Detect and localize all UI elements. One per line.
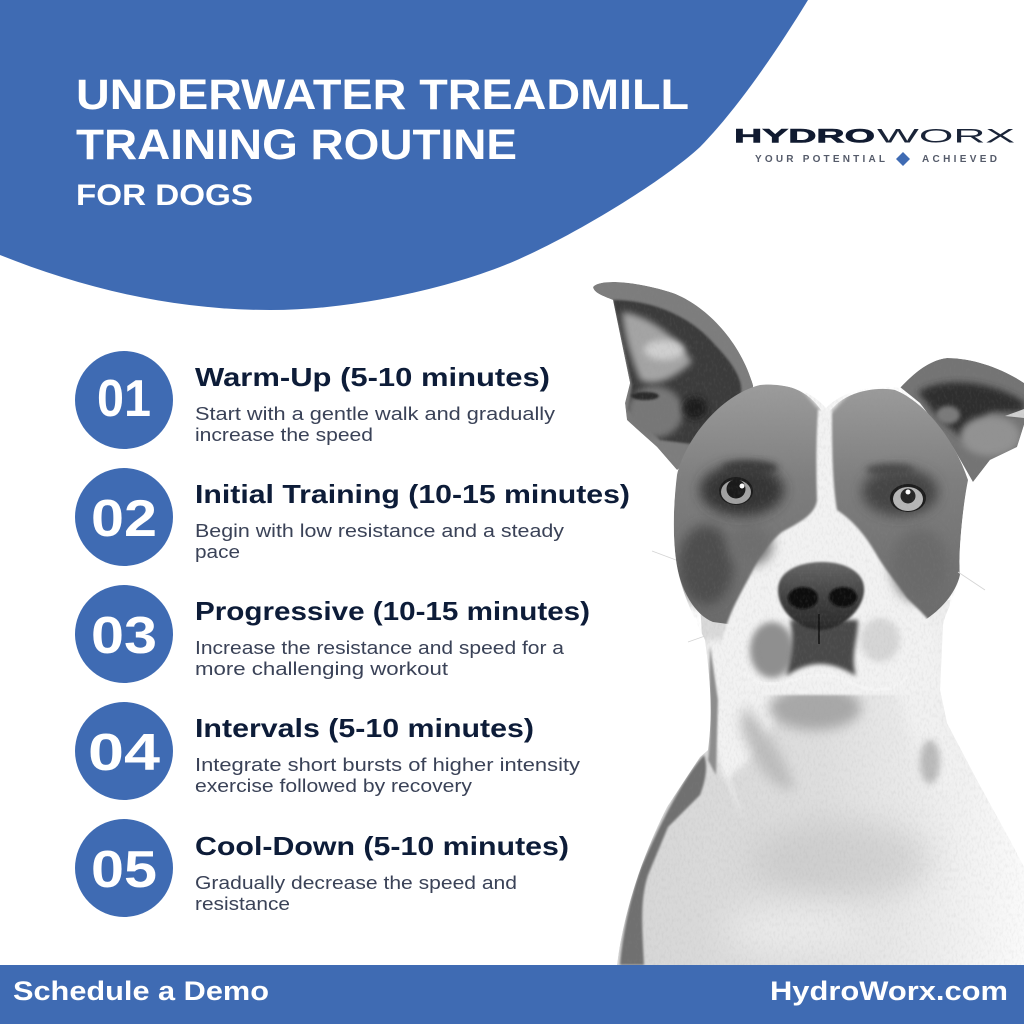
step 01: Warm-Up (5-10 minutes) [195,362,550,392]
step 03: Progressive (10-15 minutes) [195,596,590,626]
eye patches [700,464,784,516]
step 03 [75,585,590,683]
step list [75,351,630,917]
step 04 [75,702,581,800]
dog right ear [900,358,1024,482]
lip line [770,682,774,683]
step 02: 02 [91,490,157,548]
step 01 [75,351,556,449]
step 03: 03 [91,607,157,665]
right eye [890,484,926,512]
step 01: 01 [97,370,151,428]
title [76,71,689,212]
white blaze and muzzle [722,410,940,695]
logo: HydroWorx [734,126,1015,166]
muzzle shading [750,622,794,678]
step 05: Gradually decrease the speed and [195,872,517,893]
step 01: Start with a gentle walk and gradually [195,403,556,424]
nose [778,562,864,630]
step 02: Initial Training (10-15 minutes) [195,479,630,509]
step 04: 04 [88,724,160,782]
step 05: resistance [195,893,290,914]
cheek patches [678,525,734,605]
logo: HydroWorx: YOUR POTENTIAL [755,154,885,165]
dog left ear [593,282,753,470]
step 04: Integrate short bursts of higher intensity [195,754,581,775]
logo: HydroWorx: WORX [877,126,1015,148]
header panel: blue curved shape [0,0,808,310]
title: TRAINING ROUTINE [76,121,517,169]
dog head [674,384,968,695]
title: FOR DOGS [76,179,253,212]
dog neck and body [617,600,1024,965]
call to action: Schedule a Demo [13,976,269,1006]
left eye [719,477,753,505]
step 02: Begin with low resistance and a steady [195,520,565,541]
step 03: Increase the resistance and speed for a [195,637,565,658]
step 05: Cool-Down (5-10 minutes) [195,831,569,861]
step 04: Intervals (5-10 minutes) [195,713,534,743]
step 05 [75,819,569,917]
logo: HydroWorx: HYDRO [734,126,875,148]
title: UNDERWATER TREADMILL [76,71,689,119]
logo: HydroWorx: ACHIEVED [922,154,997,165]
website: HydroWorx.com [770,976,1008,1006]
step 05: 05 [91,841,157,899]
footer bar [0,965,1024,1024]
white forehead notch [802,392,849,414]
fur texture [642,314,1024,965]
step 02 [75,468,630,566]
whiskers [652,551,985,642]
step 03: more challenging workout [195,658,448,679]
step 04: exercise followed by recovery [195,775,473,796]
step 01: increase the speed [195,424,373,445]
step 02: pace [195,541,240,562]
illustration: black and white dog [590,275,1024,965]
